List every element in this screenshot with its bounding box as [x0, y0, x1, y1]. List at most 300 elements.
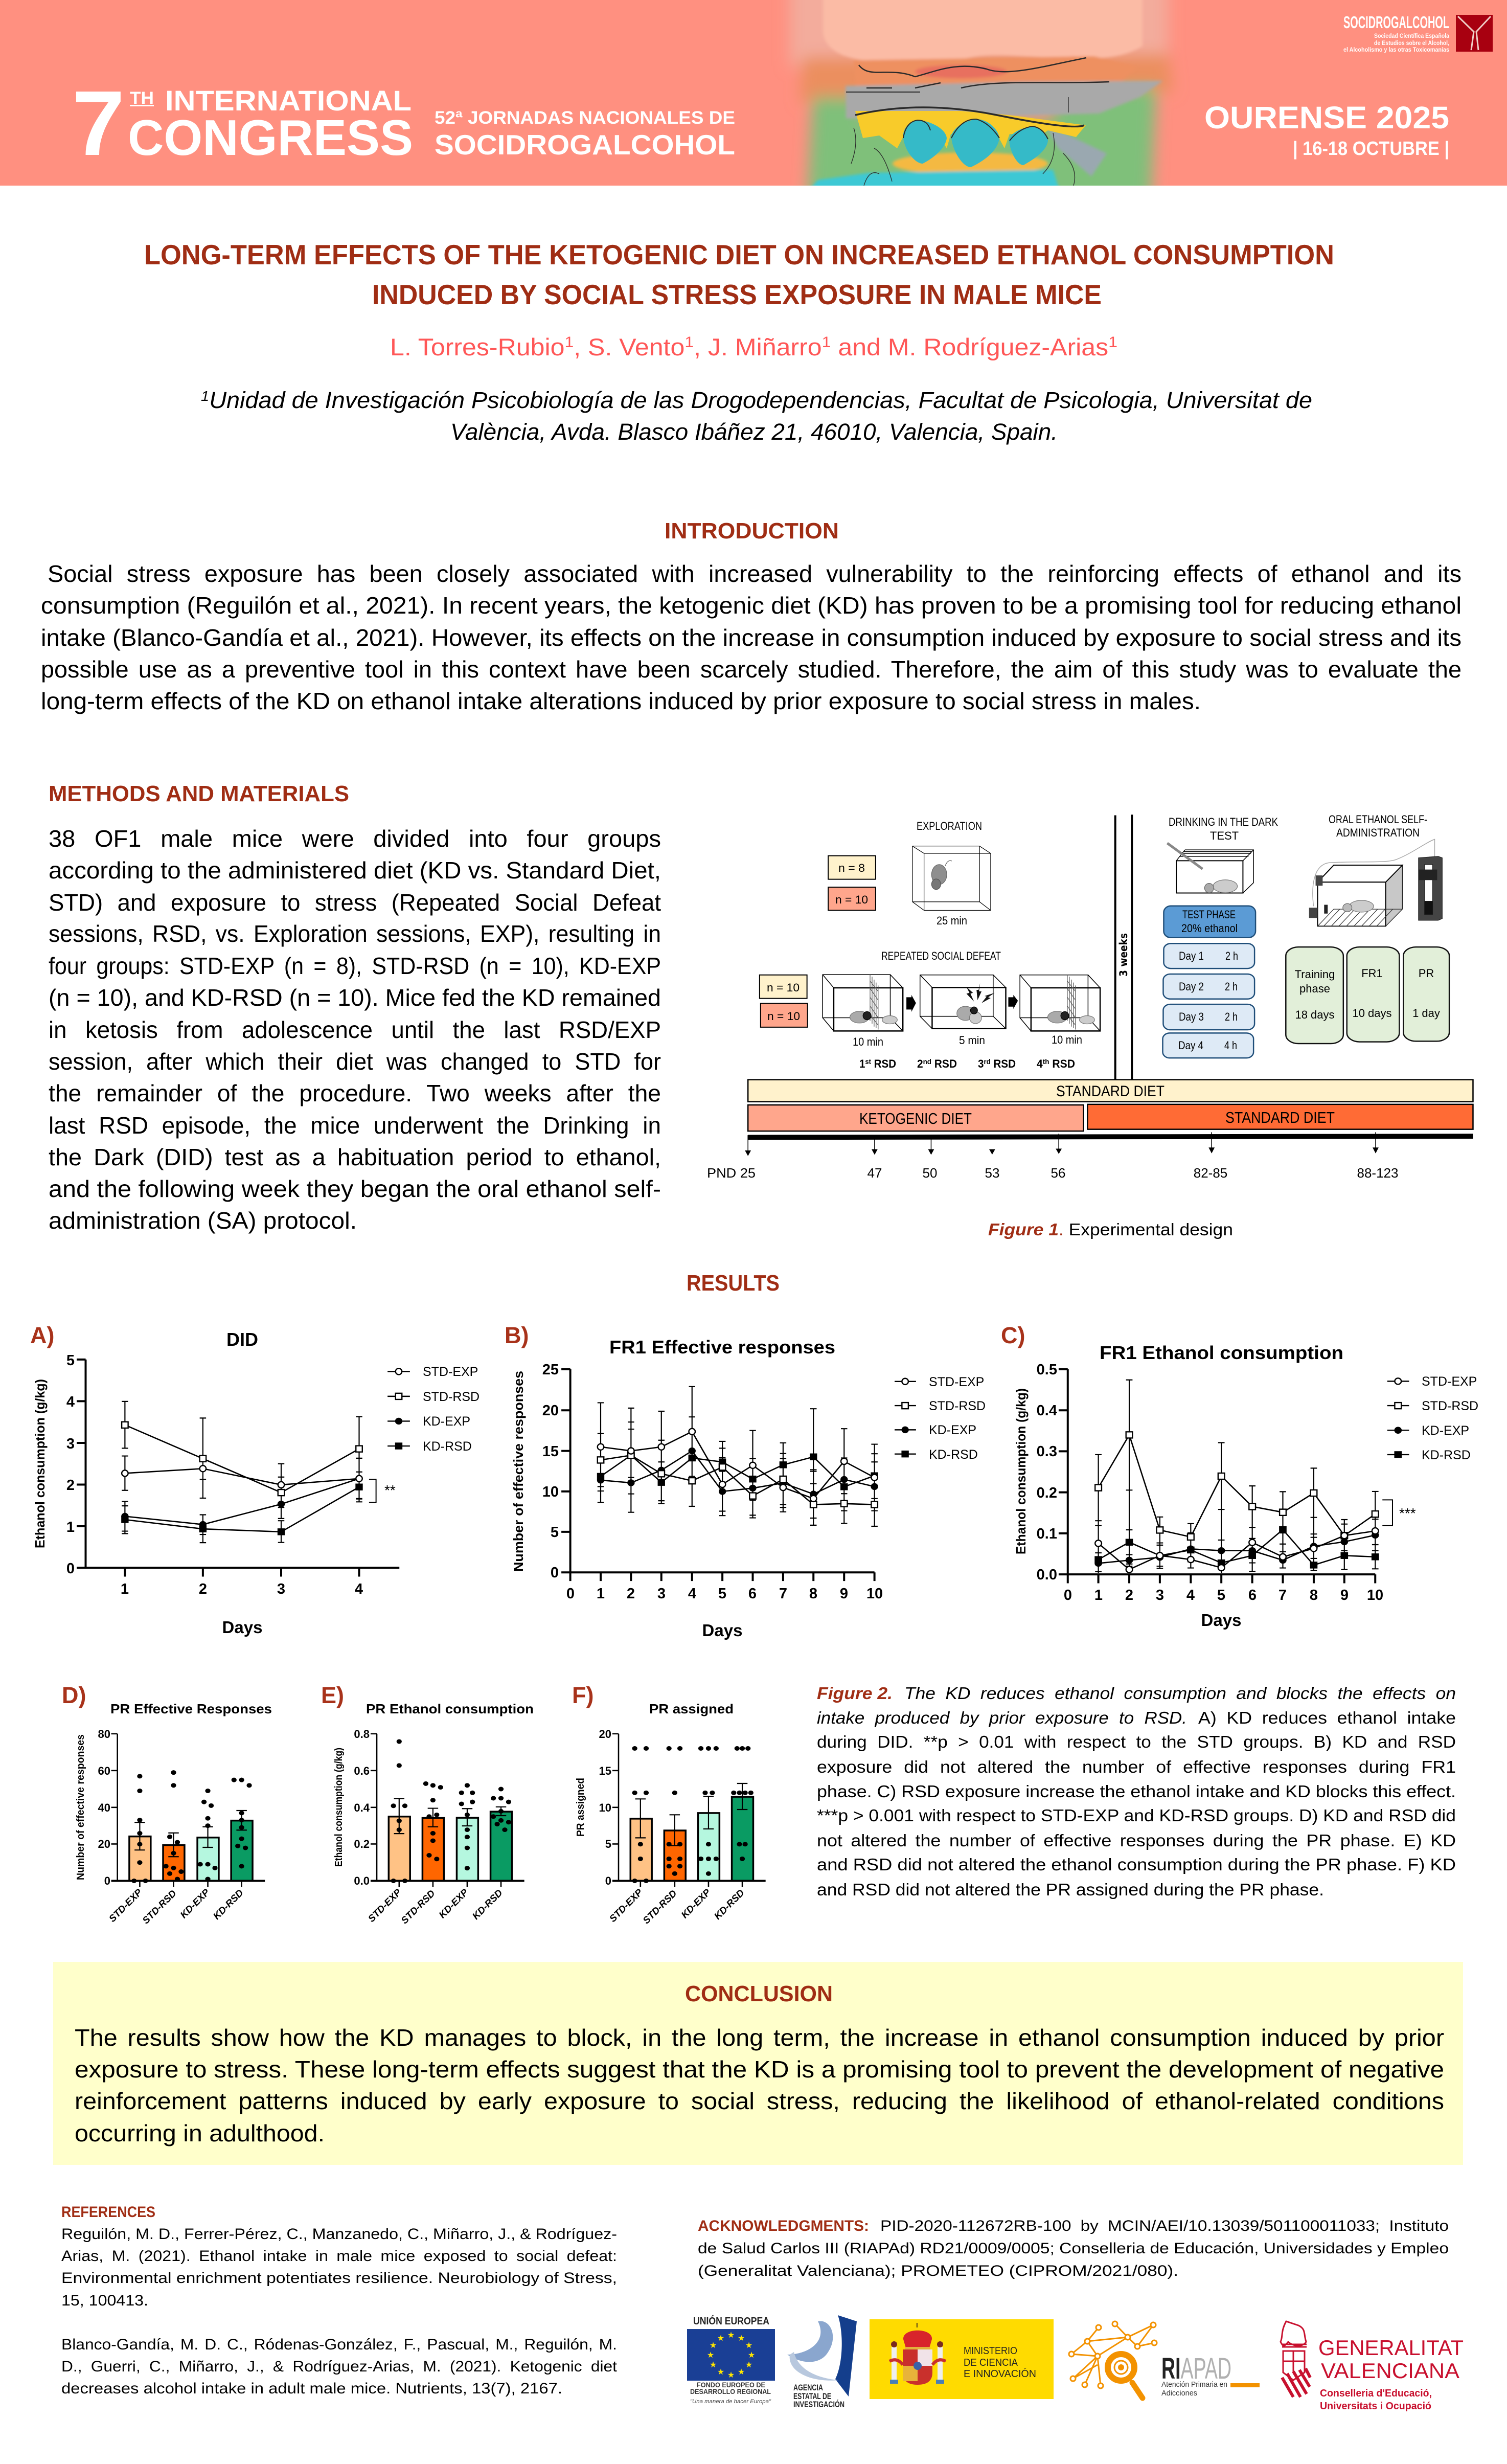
chart A: DID: DID	[226, 1329, 258, 1350]
references: Arias, M. (2021). Ethanol intake in male mice exposed to social defeat:	[61, 2248, 617, 2265]
conclusion text: The results show how the KD manages to block, in the long term, the increase in ethanol consumption induced by prior	[75, 2024, 1444, 2051]
introduction heading: INTRODUCTION	[665, 518, 839, 544]
introduction text: intake (Blanco-Gandía et al., 2021). However, its effects on the increase in consumption induced by exposure to social stress and its	[41, 624, 1462, 651]
figure 1 labels: RSD	[991, 1057, 1016, 1070]
figure 1 labels: th	[1043, 1057, 1049, 1066]
references: Environmental enrichment potentiates resilience. Neurobiology of Stress,	[61, 2270, 617, 2287]
logo: European Union ERDF: ★	[710, 2341, 717, 2350]
logo: Agencia Estatal de Investigación: ESTATAL DE	[793, 2391, 831, 2401]
chart C axis labels: Ethanol consumption (g/kg)	[1013, 1388, 1029, 1554]
chart C axis labels: KD-EXP	[1422, 1423, 1469, 1438]
figure 1 labels: st	[865, 1057, 871, 1066]
figure 1: experimental design	[707, 813, 1473, 1181]
chart B axis labels: 0	[566, 1586, 575, 1602]
chart E axis labels: KD-RSD	[470, 1887, 505, 1922]
logo: Agencia Estatal de Investigación: INVESTIGACIÓN	[793, 2400, 844, 2409]
figure 1 labels: 82-85	[1194, 1165, 1227, 1181]
chart C axis labels: 3	[1156, 1587, 1164, 1603]
figure 1 labels: 50	[923, 1165, 937, 1181]
society logo	[1343, 13, 1493, 53]
chart F axis labels: PR assigned	[575, 1778, 586, 1837]
chart B axis labels: STD-RSD	[929, 1399, 986, 1413]
location and dates	[1204, 100, 1449, 160]
figure 1 labels: Day 4	[1178, 1039, 1203, 1052]
figure 1 labels: ORAL ETHANOL SELF-	[1329, 813, 1427, 826]
figure 1 labels: Day 3	[1179, 1010, 1204, 1023]
figure 1 labels: FR1	[1361, 967, 1383, 980]
chart C axis labels: STD-RSD	[1422, 1399, 1478, 1413]
figure 1 labels: n = 10	[767, 1010, 800, 1023]
exploration cage	[912, 846, 991, 910]
chart C axis labels: Days	[1201, 1611, 1241, 1630]
figure 1 labels: 2 h	[1225, 980, 1238, 993]
DID cage	[1167, 843, 1253, 893]
affiliation: Unidad de Investigación Psicobiología de las Drogodependencias, Facultat de Psicologia, Universitat de	[209, 387, 1312, 413]
chart C axis labels: 7	[1278, 1587, 1287, 1603]
figure 2 caption: and RSD did not altered the ethanol consumption during the PR phase. F) KD	[817, 1855, 1456, 1874]
conclusion text: exposure to stress. These long-term effects suggest that the KD is a promising tool to prevent the development of negative	[75, 2056, 1444, 2083]
chart E: PR ethanol consumption: PR Ethanol consumption	[366, 1701, 534, 1716]
logo: Agencia Estatal de Investigación: AGENCIA	[793, 2383, 823, 2392]
methods text: sessions, RSD, vs. Exploration sessions, EXP), resulting in	[49, 920, 661, 947]
figure 1 drawn shapes	[745, 815, 1473, 1156]
introduction text: consumption (Reguilón et al., 2021). In recent years, the ketogenic diet (KD) has proven to be a promising tool for reducing ethanol	[41, 592, 1462, 619]
chart A axis labels: Days	[222, 1618, 262, 1637]
chart B axis labels: STD-EXP	[929, 1375, 984, 1389]
chart B axis labels: 5	[551, 1524, 559, 1541]
figure 1 labels: EXPLORATION	[917, 820, 982, 832]
chart F axis labels: 15	[599, 1765, 611, 1777]
figure 1 labels: KETOGENIC DIET	[859, 1110, 972, 1127]
chart E axis labels: 0.4	[354, 1801, 370, 1814]
references	[61, 2204, 618, 2397]
chart A axis labels: KD-RSD	[423, 1439, 472, 1454]
logo: European Union ERDF: "Una manera de hacer Europa"	[690, 2399, 771, 2405]
methods text	[49, 825, 661, 1234]
methods text: administration (SA) protocol.	[49, 1207, 357, 1234]
figure 1 labels: RSD	[1049, 1057, 1075, 1070]
chart D: PR effective responses: PR Effective Responses	[110, 1701, 272, 1716]
chart A plot	[77, 1360, 410, 1576]
figure 1 labels: 20% ethanol	[1181, 922, 1238, 935]
header banner	[0, 0, 1507, 186]
three-week separator	[1115, 815, 1132, 1079]
logo: European Union ERDF: ★	[727, 2371, 735, 2380]
self-administration apparatus	[1309, 840, 1442, 926]
chart F axis labels: KD-EXP	[679, 1887, 713, 1920]
figure 1 labels: nd	[923, 1057, 931, 1066]
title: INDUCED BY SOCIAL STRESS EXPOSURE IN MALE MICE	[372, 279, 1102, 310]
chart C axis labels: 1	[1094, 1587, 1103, 1603]
introduction text: possible use as a preventive tool in this context have been scarcely studied. Therefore, the aim of this study was to evaluate the	[41, 656, 1462, 683]
references: Blanco-Gandía, M. D. C., Ródenas-González, F., Pascual, M., Reguilón, M.	[61, 2336, 617, 2353]
chart D axis labels: 40	[98, 1801, 110, 1814]
methods text: four groups: STD-EXP (n = 8), STD-RSD (n = 10), KD-EXP	[49, 953, 661, 979]
chart D axis labels: 20	[98, 1838, 110, 1850]
figure 2 caption: exposure did not altered the number of effective responses during FR1	[817, 1757, 1456, 1776]
logo: European Union ERDF: ★	[707, 2351, 714, 2360]
chart D: PR effective responses: D)	[62, 1682, 86, 1708]
arrows between cages	[906, 995, 1018, 1012]
methods text: (n = 10), and KD-RSD (n = 10). Mice fed the KD remained	[49, 984, 661, 1011]
methods text: the remainder of the procedure. Two weeks after the	[49, 1080, 661, 1106]
chart E axis labels: STD-EXP	[366, 1887, 404, 1925]
figure 1 labels: TEST PHASE	[1182, 908, 1236, 921]
figure 1 labels: 1	[859, 1057, 865, 1070]
chart D axis labels: 60	[98, 1765, 110, 1777]
logo: European Union ERDF: ★	[748, 2351, 755, 2360]
chart B: FR1 effective responses	[505, 1322, 986, 1640]
figure 1 labels: Day 2	[1179, 980, 1204, 993]
logo: European Union ERDF: ★	[745, 2341, 752, 2350]
chart D axis labels: 80	[98, 1728, 110, 1740]
chart C axis labels: 6	[1248, 1587, 1257, 1603]
methods text: STD) and exposure to stress (Repeated Social Defeat	[49, 889, 661, 916]
phase boxes	[1286, 947, 1449, 1044]
methods text: and the following week they began the oral ethanol self-	[49, 1176, 661, 1202]
figure 1 labels: 3	[978, 1057, 984, 1070]
chart C: FR1 ethanol consumption	[1001, 1322, 1478, 1630]
logo: Agencia Estatal de Investigación	[787, 2315, 857, 2409]
methods text: the Dark (DID) test as a habituation period to ethanol,	[49, 1144, 661, 1170]
chart E axis labels: STD-RSD	[399, 1888, 438, 1926]
logo: Ministerio de Ciencia e Innovación: E INNOVACIÓN	[964, 2368, 1036, 2380]
chart D axis labels: KD-RSD	[211, 1887, 246, 1922]
figure 1 labels: 18 days	[1295, 1008, 1335, 1021]
chart A: DID: A)	[30, 1322, 54, 1348]
chart F: PR assigned	[572, 1682, 766, 1926]
chart E plot	[371, 1734, 524, 1887]
figure 1 labels	[707, 813, 1440, 1181]
chart F axis labels: 5	[605, 1838, 611, 1850]
chart D: PR effective responses	[62, 1682, 272, 1926]
introduction text: long-term effects of the KD on ethanol intake alterations induced by prior exposure to social stress in males.	[41, 688, 1201, 714]
figure 1 labels: 88-123	[1357, 1165, 1398, 1181]
chart F axis labels: STD-RSD	[641, 1888, 679, 1926]
chart A axis labels: 1	[66, 1519, 75, 1535]
figure 1 labels: STANDARD DIET	[1225, 1109, 1335, 1126]
logo: Ministerio de Ciencia e Innovación: MINISTERIO	[964, 2345, 1017, 2357]
figure 1 labels: 53	[985, 1165, 999, 1181]
chart A axis labels: Ethanol consumption (g/kg)	[32, 1379, 48, 1548]
logo: European Union ERDF: ★	[717, 2368, 724, 2377]
diet bars	[748, 1080, 1473, 1131]
figure 2 caption: Figure 2.	[817, 1684, 893, 1703]
authors: , S. Vento	[574, 333, 684, 360]
chart B axis labels: 3	[657, 1586, 666, 1602]
figure 2 caption: intake produced by prior exposure to RSD.	[817, 1708, 1187, 1727]
chart F plot	[612, 1734, 766, 1887]
logo: RIAPAD: Atención Primaria en	[1161, 2380, 1227, 2389]
chart B axis labels: 5	[718, 1586, 726, 1602]
chart B: FR1 effective responses: FR1 Effective responses	[609, 1337, 835, 1358]
chart C: FR1 ethanol consumption: FR1 Ethanol consumption	[1100, 1342, 1343, 1363]
figure 1 labels: 5 min	[959, 1034, 985, 1047]
logo: European Union ERDF	[687, 2315, 775, 2405]
chart C axis labels: 0.1	[1037, 1526, 1057, 1542]
chart C axis labels: 5	[1217, 1587, 1225, 1603]
chart C axis labels: 9	[1340, 1587, 1349, 1603]
chart B axis labels: 1	[597, 1586, 605, 1602]
methods text: according to the administered diet (KD vs. Standard Diet,	[49, 857, 661, 884]
figure 1 labels: STANDARD DIET	[1056, 1083, 1164, 1100]
chart C axis labels: 0.0	[1037, 1567, 1057, 1583]
logo: European Union ERDF: UNIÓN EUROPEA	[693, 2315, 769, 2327]
chart A axis labels: **	[384, 1482, 396, 1498]
chart B axis labels: KD-RSD	[929, 1448, 978, 1462]
chart E axis labels: 0.0	[354, 1874, 370, 1887]
congress logo text: INTERNATIONAL	[165, 84, 412, 117]
society logo: el Alcoholismo y las otras Toxicomanías	[1343, 46, 1449, 53]
chart D plot	[111, 1734, 265, 1887]
authors: 1	[684, 334, 694, 351]
chart E axis labels: Ethanol consumption (g/kg)	[333, 1748, 345, 1867]
chart B axis labels: 6	[748, 1586, 757, 1602]
chart D axis labels: KD-EXP	[178, 1887, 212, 1920]
logo: Ministerio de Ciencia e Innovación	[870, 2319, 1054, 2399]
methods text: 38 OF1 male mice were divided into four groups	[49, 825, 661, 852]
society logo: Sociedad Científica Española	[1374, 32, 1449, 39]
chart C axis labels: 0.3	[1037, 1443, 1057, 1460]
authors: 1	[822, 334, 831, 351]
logo: European Union ERDF: ★	[738, 2368, 745, 2377]
figure 1 labels: 2 h	[1225, 1010, 1238, 1023]
authors: 1	[564, 334, 574, 351]
figure 2 caption: during DID. **p > 0.01 with respect to the STD groups. B) KD and RSD	[817, 1732, 1456, 1751]
title: LONG-TERM EFFECTS OF THE KETOGENIC DIET ON INCREASED ETHANOL CONSUMPTION	[144, 239, 1334, 270]
chart C axis labels: 4	[1186, 1587, 1195, 1603]
logo: European Union ERDF: ★	[727, 2331, 735, 2340]
figure 1 labels: 4	[1037, 1057, 1043, 1070]
chart A axis labels: 0	[66, 1561, 75, 1577]
figure 1 labels: 2	[917, 1057, 923, 1070]
chart B axis labels: 4	[688, 1586, 696, 1602]
chart A axis labels: STD-EXP	[423, 1365, 478, 1379]
location and dates: | 16-18 OCTUBRE |	[1293, 138, 1449, 160]
conclusion text: occurring in adulthood.	[75, 2120, 325, 2146]
chart B axis labels: Number of effective responses	[511, 1371, 526, 1572]
figure 1 labels: PND 25	[707, 1165, 756, 1181]
chart F: PR assigned: F)	[572, 1682, 593, 1708]
chart C axis labels: 10	[1367, 1587, 1383, 1603]
logo: RIAPAD: RIAPAD	[1161, 2352, 1231, 2385]
header painting: bridge landscape	[785, 0, 1176, 186]
congress logo text	[72, 72, 735, 175]
affiliation: 1	[201, 388, 209, 404]
chart C plot	[1059, 1369, 1409, 1583]
logo: Generalitat Valenciana: Conselleria d'Educació,	[1320, 2388, 1432, 2399]
references: REFERENCES	[61, 2204, 155, 2221]
logo: European Union ERDF: ★	[710, 2361, 717, 2369]
chart E axis labels: 0.6	[354, 1765, 370, 1777]
chart A axis labels: 2	[66, 1477, 75, 1494]
chart B axis labels: 7	[779, 1586, 787, 1602]
chart E axis labels: 0.2	[354, 1838, 370, 1850]
figure 1 labels: Training	[1295, 968, 1335, 981]
conclusion text	[75, 2024, 1444, 2146]
chart E axis labels	[333, 1728, 505, 1926]
logo: Generalitat Valenciana	[1281, 2321, 1464, 2412]
acknowledgments: (Generalitat Valenciana); PROMETEO (CIPROM/2021/080).	[698, 2263, 1178, 2279]
chart F axis labels	[575, 1728, 747, 1926]
affiliation: València, Avda. Blasco Ibáñez 21, 46010, Valencia, Spain.	[450, 419, 1058, 445]
chart C axis labels: 0	[1064, 1587, 1072, 1603]
figure 1 labels: 25 min	[937, 914, 967, 927]
results heading: RESULTS	[687, 1271, 780, 1296]
chart C axis labels: KD-RSD	[1422, 1448, 1471, 1462]
conclusion heading: CONCLUSION	[685, 1981, 833, 2006]
timeline	[745, 1132, 1473, 1156]
acknowledgments	[698, 2218, 1449, 2279]
chart B axis labels: KD-EXP	[929, 1423, 976, 1437]
congress logo text: CONGRESS	[128, 109, 413, 166]
figure 2 caption: not altered the number of effective responses during the PR phase. E) KD	[817, 1831, 1456, 1850]
chart C axis labels: 0.2	[1037, 1485, 1057, 1501]
chart F axis labels: 0	[605, 1874, 611, 1887]
chart B axis labels: 2	[627, 1586, 635, 1602]
figure 2 caption	[817, 1684, 1456, 1899]
chart A axis labels: STD-RSD	[423, 1390, 480, 1404]
logo: RIAPAD	[1069, 2321, 1260, 2398]
chart E axis labels: KD-EXP	[437, 1887, 471, 1920]
chart A: DID	[30, 1322, 480, 1637]
figure 2 caption: and RSD did not altered the PR assigned during the PR phase.	[817, 1880, 1324, 1899]
authors: , J. Miñarro	[694, 333, 822, 360]
chart A axis labels: 5	[66, 1352, 75, 1369]
figure 2 caption: The KD reduces ethanol consumption and blocks the effects on	[904, 1684, 1456, 1703]
chart A axis labels: KD-EXP	[423, 1414, 470, 1429]
chart D axis labels: Number of effective responses	[75, 1734, 86, 1880]
methods text: in ketosis from adolescence until the last RSD/EXP	[49, 1016, 661, 1043]
methods text: session, after which their diet was changed to STD for	[49, 1048, 661, 1075]
figure 1 labels: n = 10	[835, 893, 868, 906]
figure 1 labels: 3 weeks	[1117, 933, 1130, 977]
chart E: PR ethanol consumption: E)	[321, 1682, 344, 1708]
references: Reguilón, M. D., Ferrer-Pérez, C., Manzanedo, C., Miñarro, J., & Rodríguez-	[61, 2226, 617, 2243]
logo: European Union ERDF: ★	[745, 2361, 752, 2369]
chart B axis labels	[511, 1362, 986, 1640]
figure 1 labels: REPEATED SOCIAL DEFEAT	[881, 950, 1001, 962]
figure 1 labels: Day 1	[1179, 950, 1204, 962]
figure 1 labels: DRINKING IN THE DARK	[1169, 816, 1278, 828]
chart C axis labels: STD-EXP	[1422, 1374, 1477, 1389]
figure 1 labels: TEST	[1210, 829, 1239, 842]
chart F: PR assigned: PR assigned	[649, 1701, 734, 1716]
methods heading: METHODS AND MATERIALS	[49, 781, 349, 806]
chart D axis labels: 0	[104, 1874, 110, 1887]
logo: European Union ERDF: ★	[717, 2334, 724, 2343]
figure 2 caption: ***p > 0.001 with respect to STD-EXP and KD-RSD groups. D) KD and RSD did	[817, 1806, 1456, 1825]
authors: and M. Rodríguez-Arias	[831, 333, 1108, 360]
figure 1 labels: n = 8	[838, 862, 865, 874]
chart D axis labels: STD-RSD	[141, 1888, 179, 1926]
congress logo text: 7	[72, 72, 125, 175]
acknowledgments: ACKNOWLEDGMENTS:	[698, 2218, 869, 2234]
title	[144, 239, 1334, 310]
congress logo text: TH	[130, 88, 154, 108]
conclusion text: reinforcement patterns induced by early exposure to social stress, reducing the likelihood of ethanol-related conditions	[75, 2088, 1444, 2114]
acknowledgments: PID-2020-112672RB-100 by MCIN/AEI/10.13039/501100011033; Instituto	[880, 2218, 1449, 2234]
chart A axis labels: 4	[355, 1581, 363, 1597]
references: decreases alcohol intake in adult male mice. Nutrients, 13(7), 2167.	[61, 2380, 562, 2397]
figure 1 labels: 1 day	[1412, 1007, 1440, 1020]
chart B: FR1 effective responses: B)	[505, 1322, 529, 1348]
figure 1 labels: 10 days	[1352, 1007, 1392, 1020]
chart A axis labels	[32, 1352, 480, 1637]
chart C axis labels: 0.5	[1037, 1362, 1057, 1378]
chart D axis labels	[75, 1728, 246, 1926]
figure 1 labels: RSD	[931, 1057, 957, 1070]
logo: European Union ERDF: DESARROLLO REGIONAL	[690, 2387, 771, 2395]
chart C axis labels: 2	[1125, 1587, 1133, 1603]
figure 2 caption: A) KD reduces ethanol intake	[1198, 1708, 1456, 1727]
references: 15, 100413.	[61, 2292, 148, 2309]
figure 1 labels: phase	[1299, 982, 1330, 995]
introduction text	[41, 560, 1462, 714]
references: D., Guerri, C., Miñarro, J., & Rodríguez-Arias, M. (2021). Ketogenic diet	[61, 2358, 618, 2375]
chart A axis labels: 3	[66, 1436, 75, 1452]
chart A axis labels: 3	[277, 1581, 285, 1597]
panel: conclusion	[53, 1962, 1463, 2165]
figure 1 labels: RSD	[871, 1057, 896, 1070]
figure 1 labels: 47	[867, 1165, 882, 1181]
chart A axis labels: 1	[121, 1581, 129, 1597]
figure 1 labels: 10 min	[1052, 1033, 1082, 1046]
coat of arms	[889, 2323, 946, 2385]
chart E axis labels: 0.8	[354, 1728, 370, 1740]
society logo: de Estudios sobre el Alcohol,	[1374, 39, 1449, 47]
acknowledgments: de Salud Carlos III (RIAPAd) RD21/0009/0005; Conselleria de Educación, Universidades y Empleo	[698, 2240, 1449, 2257]
chart B axis labels: 9	[840, 1586, 848, 1602]
figure 2 caption: phase. C) RSD exposure increase the ethanol intake and KD blocks this effect.	[817, 1782, 1456, 1801]
chart B plot	[561, 1369, 916, 1581]
chart B axis labels: 10	[542, 1484, 559, 1500]
chart B axis labels: 10	[866, 1586, 883, 1602]
chart B axis labels: 8	[809, 1586, 817, 1602]
logo: Generalitat Valenciana: VALENCIANA	[1321, 2359, 1459, 2383]
logo: Generalitat Valenciana: GENERALITAT	[1318, 2336, 1464, 2360]
chart B axis labels: 0	[551, 1565, 559, 1581]
chart C axis labels: 8	[1310, 1587, 1318, 1603]
figure 1 labels: 56	[1051, 1165, 1065, 1181]
chart B axis labels: 15	[542, 1443, 559, 1460]
figure 1 labels: 2 h	[1225, 950, 1238, 962]
figure 1 labels: 10 min	[853, 1035, 883, 1048]
authors: L. Torres-Rubio	[390, 333, 554, 360]
authors: 1	[1108, 334, 1117, 351]
figure 1 caption: Figure 1 . Experimental design	[988, 1220, 1233, 1239]
social defeat cage 2	[920, 975, 1006, 1029]
test phase box	[1163, 906, 1255, 938]
chart C axis labels: 0.4	[1037, 1403, 1057, 1419]
figure 1 labels: PR	[1419, 967, 1434, 980]
chart F axis labels: KD-RSD	[712, 1887, 747, 1922]
figure 1 labels: ADMINISTRATION	[1336, 826, 1420, 839]
figure 1 labels: rd	[984, 1057, 991, 1066]
logo: European Union ERDF: ★	[738, 2334, 745, 2343]
social defeat cage 1	[823, 975, 903, 1031]
chart A axis labels: 2	[199, 1581, 207, 1597]
congress logo text: SOCIDROGALCOHOL	[435, 129, 735, 161]
chart F axis labels: 10	[599, 1801, 611, 1814]
day boxes	[1162, 943, 1254, 1058]
chart B axis labels: 25	[542, 1362, 559, 1378]
chart F axis labels: 20	[599, 1728, 611, 1740]
logo: RIAPAD: Adicciones	[1161, 2389, 1197, 2398]
congress logo text: 52ª JORNADAS NACIONALES DE	[435, 108, 735, 128]
chart C axis labels: ***	[1399, 1505, 1416, 1521]
logo: European Union ERDF: FONDO EUROPEO DE	[697, 2381, 765, 2389]
